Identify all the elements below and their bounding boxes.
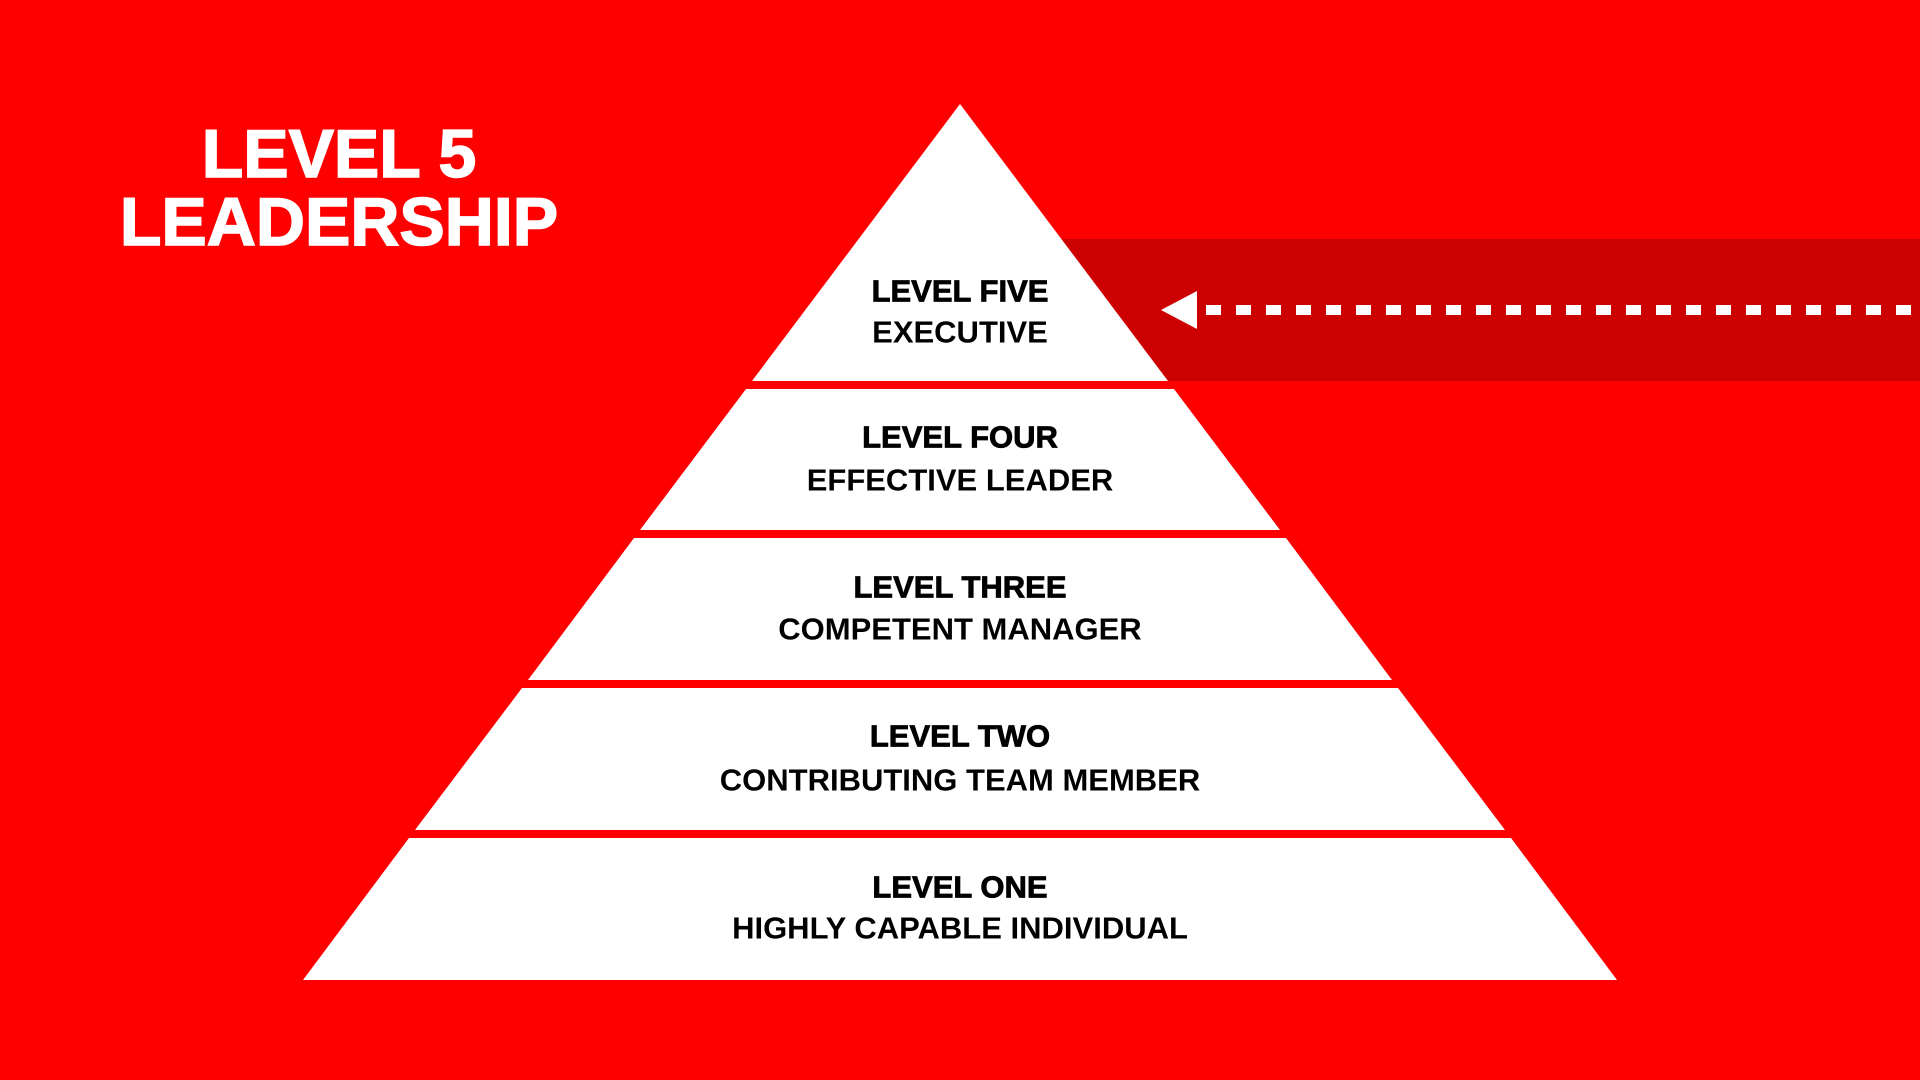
pyramid labels: CONTRIBUTING TEAM MEMBER — [720, 762, 1200, 798]
level two band — [415, 688, 1505, 830]
highlight band — [900, 239, 1920, 381]
pyramid labels: EFFECTIVE LEADER — [807, 462, 1113, 498]
level one band — [303, 838, 1617, 980]
arrow pointing to level five — [1161, 291, 1920, 329]
pyramid labels: LEVEL TWO — [870, 718, 1050, 754]
pyramid labels: HIGHLY CAPABLE INDIVIDUAL — [732, 910, 1188, 946]
level three band — [528, 538, 1392, 680]
title — [120, 116, 558, 260]
pyramid labels — [720, 274, 1200, 946]
level four band — [640, 389, 1280, 530]
pyramid labels: LEVEL FIVE — [872, 274, 1048, 308]
pyramid labels: LEVEL THREE — [853, 570, 1067, 604]
pyramid labels: COMPETENT MANAGER — [778, 612, 1142, 646]
pyramid — [303, 104, 1617, 980]
level five band — [752, 104, 1168, 381]
pyramid labels: LEVEL ONE — [872, 870, 1048, 904]
title: LEVEL 5 — [202, 116, 476, 192]
pyramid labels: EXECUTIVE — [872, 314, 1048, 350]
pyramid labels: LEVEL FOUR — [862, 420, 1058, 454]
title: LEADERSHIP — [120, 184, 558, 260]
